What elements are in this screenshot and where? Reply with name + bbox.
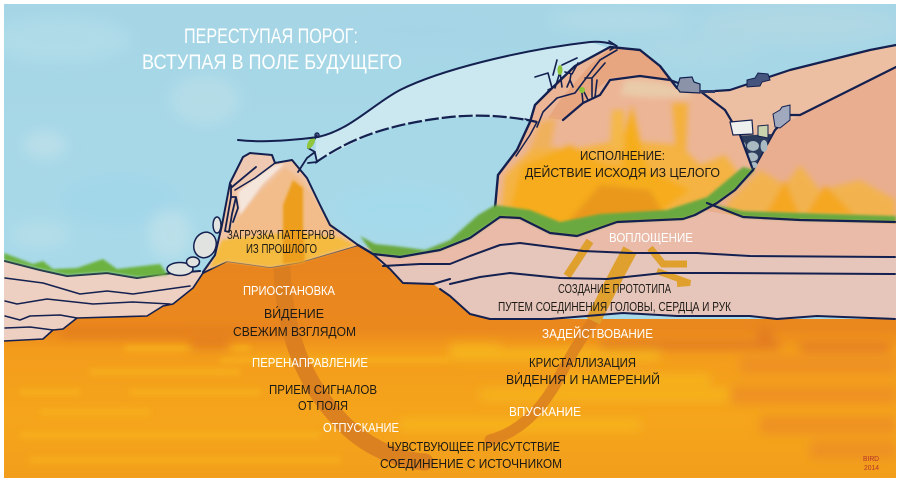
label: performing <box>525 151 720 180</box>
artist signature: BIRD <box>863 456 879 463</box>
label: seeing with fresh eyes <box>233 306 356 339</box>
stones at the foot of the left hill <box>167 217 221 276</box>
label: embodying: ВОПЛОЩЕНИЕ <box>609 230 693 245</box>
middle and right pink strata <box>358 205 896 321</box>
title: ПЕРЕСТУПАЯ ПОРОГ: <box>184 25 358 48</box>
label: presencing: СОЕДИНЕНИЕ С ИСТОЧНИКОМ <box>380 456 562 471</box>
main hill <box>495 47 753 236</box>
arrow: leap to the future <box>238 41 617 141</box>
label: enacting: ЗАДЕЙСТВОВАНИЕ <box>542 326 653 341</box>
sky background <box>4 4 896 319</box>
green grass band <box>358 167 896 257</box>
footprints rising through the strata <box>567 241 690 321</box>
label: sensing from the field <box>270 385 376 410</box>
retaining wall of stones <box>741 134 772 168</box>
label: downloading patterns <box>227 230 334 253</box>
left pink strata <box>4 261 203 341</box>
ground mound outline <box>203 245 373 273</box>
label: crystallizing: КРИСТАЛЛИЗАЦИЯ <box>529 355 636 370</box>
label: prototyping: ПУТЕМ СОЕДИНЕНИЯ ГОЛОВЫ, СЕРДЦА И РУК <box>498 299 731 314</box>
houses above the stone wall <box>730 105 790 138</box>
ground: orange subsoil <box>4 245 896 478</box>
artist signature: 2014 <box>864 465 879 472</box>
label: suspending: ПРИОСТАНОВКА <box>243 283 335 298</box>
artist signature <box>864 456 879 470</box>
label: redirecting: ПЕРЕНАПРАВЛЕНИЕ <box>252 355 368 370</box>
label: downloading patterns: ЗАГРУЗКА ПАТТЕРНОВ <box>227 227 335 242</box>
label: prototyping <box>498 284 731 314</box>
left grass <box>4 253 168 277</box>
label: performing: ИСПОЛНЕНИЕ: <box>580 148 665 163</box>
group of figures on the main hill <box>535 58 605 103</box>
label: crystallizing <box>507 358 659 386</box>
label: seeing with fresh eyes: СВЕЖИМ ВЗГЛЯДОМ <box>233 324 356 339</box>
label: sensing from the field: ПРИЕМ СИГНАЛОВ <box>269 382 377 397</box>
left hill <box>203 153 358 272</box>
title <box>142 25 402 74</box>
label: prototyping: СОЗДАНИЕ ПРОТОТИПА <box>558 281 671 296</box>
climber on the left hill <box>225 167 256 232</box>
stepping figure on the threshold <box>298 133 319 172</box>
label: presencing <box>380 442 562 470</box>
label: sensing from the field: ОТ ПОЛЯ <box>298 398 348 413</box>
label: crystallizing: ВИ́ДЕНИЯ И НАМЕРЕНИЙ <box>506 372 660 387</box>
label: letting come: ВПУСКАНИЕ <box>509 404 581 419</box>
light field between arrow and dashed line <box>315 42 615 163</box>
dashed line: bridge to the future <box>315 116 537 163</box>
title: ВСТУПАЯ В ПОЛЕ БУДУЩЕГО <box>142 51 402 74</box>
label: performing: ДЕЙСТВИЕ ИСХОДЯ ИЗ ЦЕЛОГО <box>525 165 720 180</box>
footprint path through the ground <box>282 268 593 462</box>
houses on the ridge <box>677 73 770 93</box>
label: presencing: ЧУВСТВУЮЩЕЕ ПРИСУТСТВИЕ <box>387 439 560 454</box>
label: seeing with fresh eyes: ВИ́ДЕНИЕ <box>264 306 324 321</box>
label: letting go: ОТПУСКАНИЕ <box>323 420 399 435</box>
right hill <box>700 45 896 224</box>
label: downloading patterns: ИЗ ПРОШЛОГО <box>246 241 317 256</box>
